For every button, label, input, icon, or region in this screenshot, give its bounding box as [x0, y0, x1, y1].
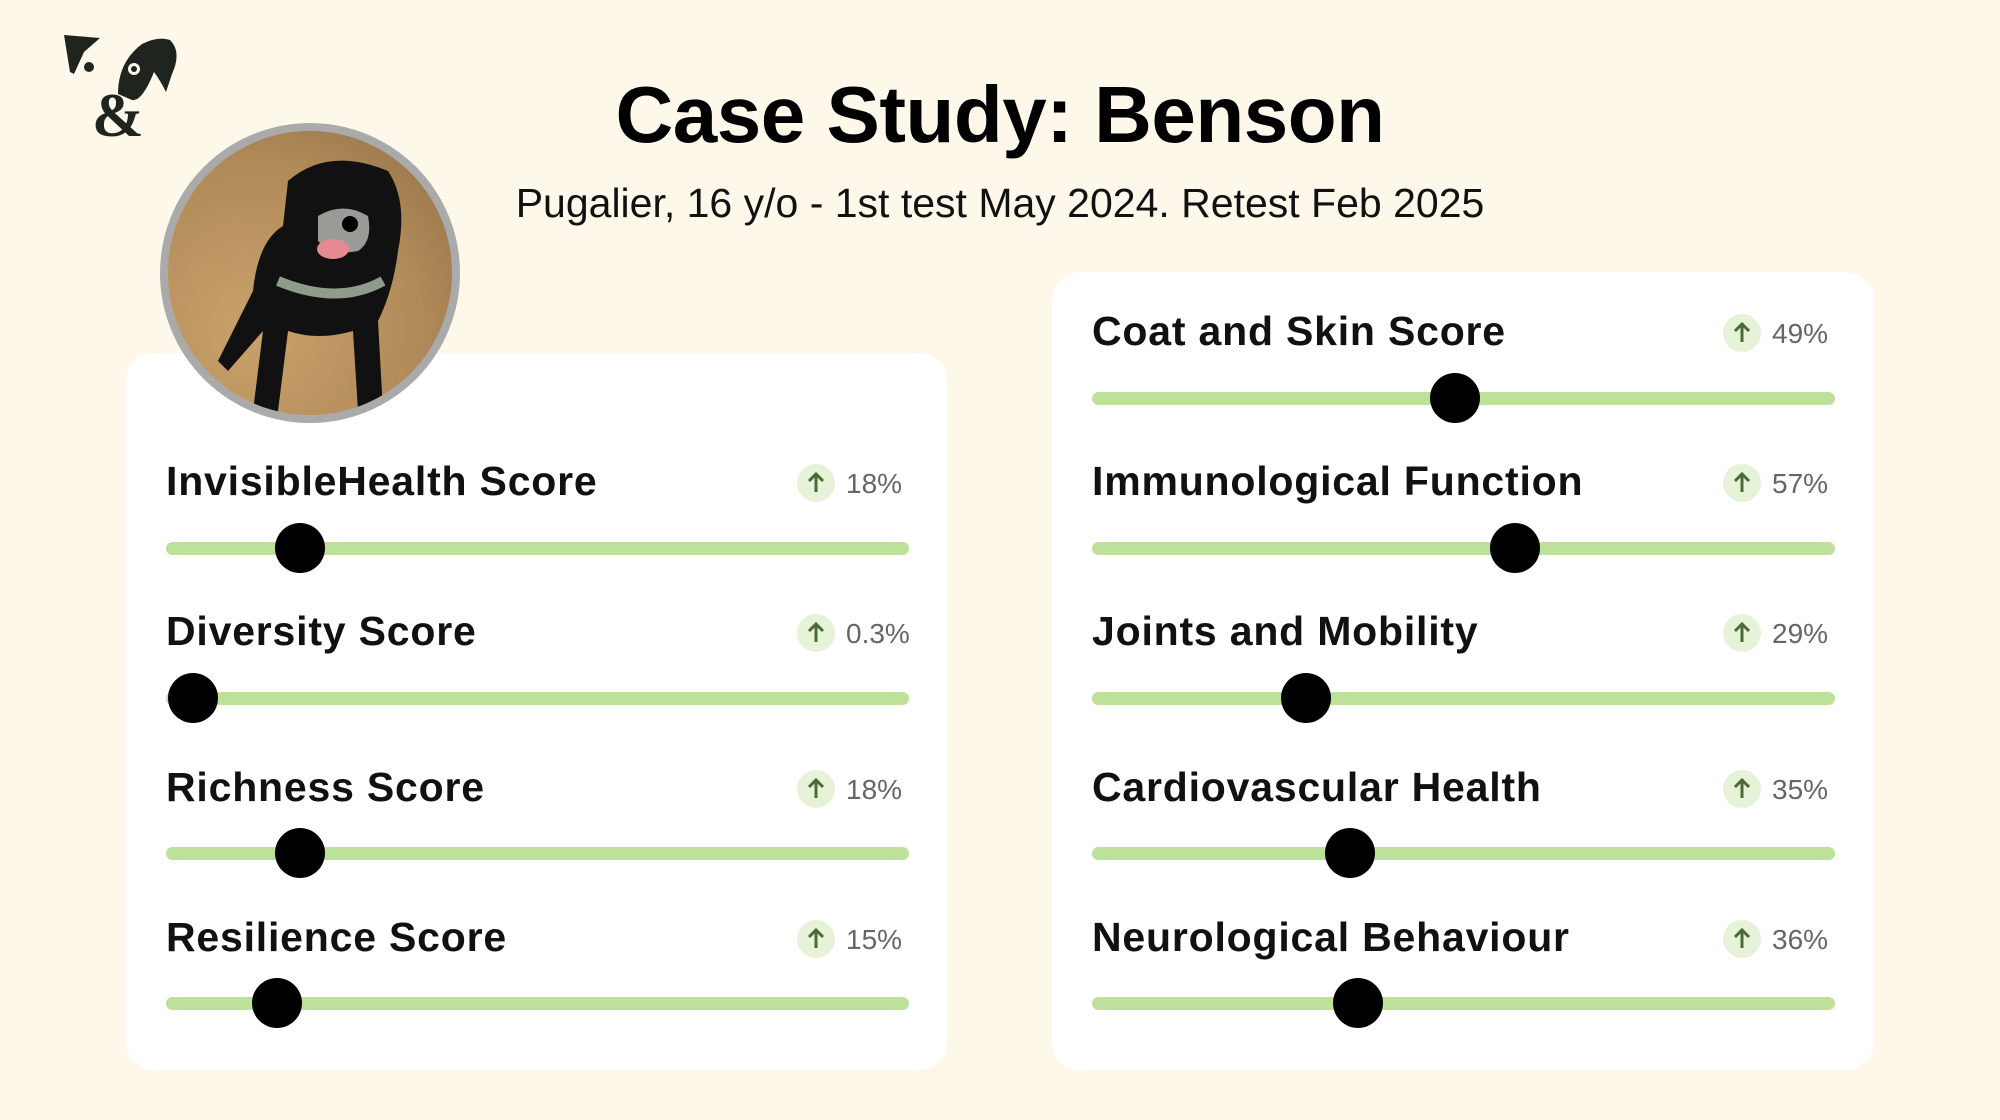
photo: Benson: [160, 123, 460, 423]
label: Resilience: Resilience Score: [166, 914, 507, 960]
label: Joints: Joints and Mobility: [1092, 608, 1478, 654]
panel: left scores: 18%: [846, 468, 902, 499]
panel: right scores: 57%: [1772, 468, 1828, 499]
badge: [797, 464, 835, 502]
panel: left scores: 0.3%: [846, 618, 910, 649]
panel: left scores: 15%: [846, 924, 902, 955]
panel: right scores: 35%: [1772, 774, 1828, 805]
label: Richness: Richness Score: [166, 764, 485, 810]
panel: right scores: 29%: [1772, 618, 1828, 649]
subtitle: Pugalier, 16 y/o - 1st test May 2024. Retest Feb 2025: [516, 180, 1484, 226]
label: Cardiovascular: Cardiovascular Health: [1092, 764, 1542, 810]
panel: left scores: 18%: [846, 774, 902, 805]
title: Case Study: Benson: [616, 70, 1384, 159]
label: InvisibleHealth: InvisibleHealth Score: [166, 458, 598, 504]
panel: right scores: [1052, 272, 1874, 1070]
panel: right scores: 49%: [1772, 318, 1828, 349]
label: Diversity: Diversity Score: [166, 608, 477, 654]
label: Neurological: Neurological Behaviour: [1092, 914, 1570, 960]
logo: [64, 35, 177, 140]
panel: right scores: 36%: [1772, 924, 1828, 955]
label: Coat and Skin: Coat and Skin Score: [1092, 308, 1506, 354]
panel: left scores: [126, 353, 947, 1070]
label: Immunological: Immunological Function: [1092, 458, 1583, 504]
